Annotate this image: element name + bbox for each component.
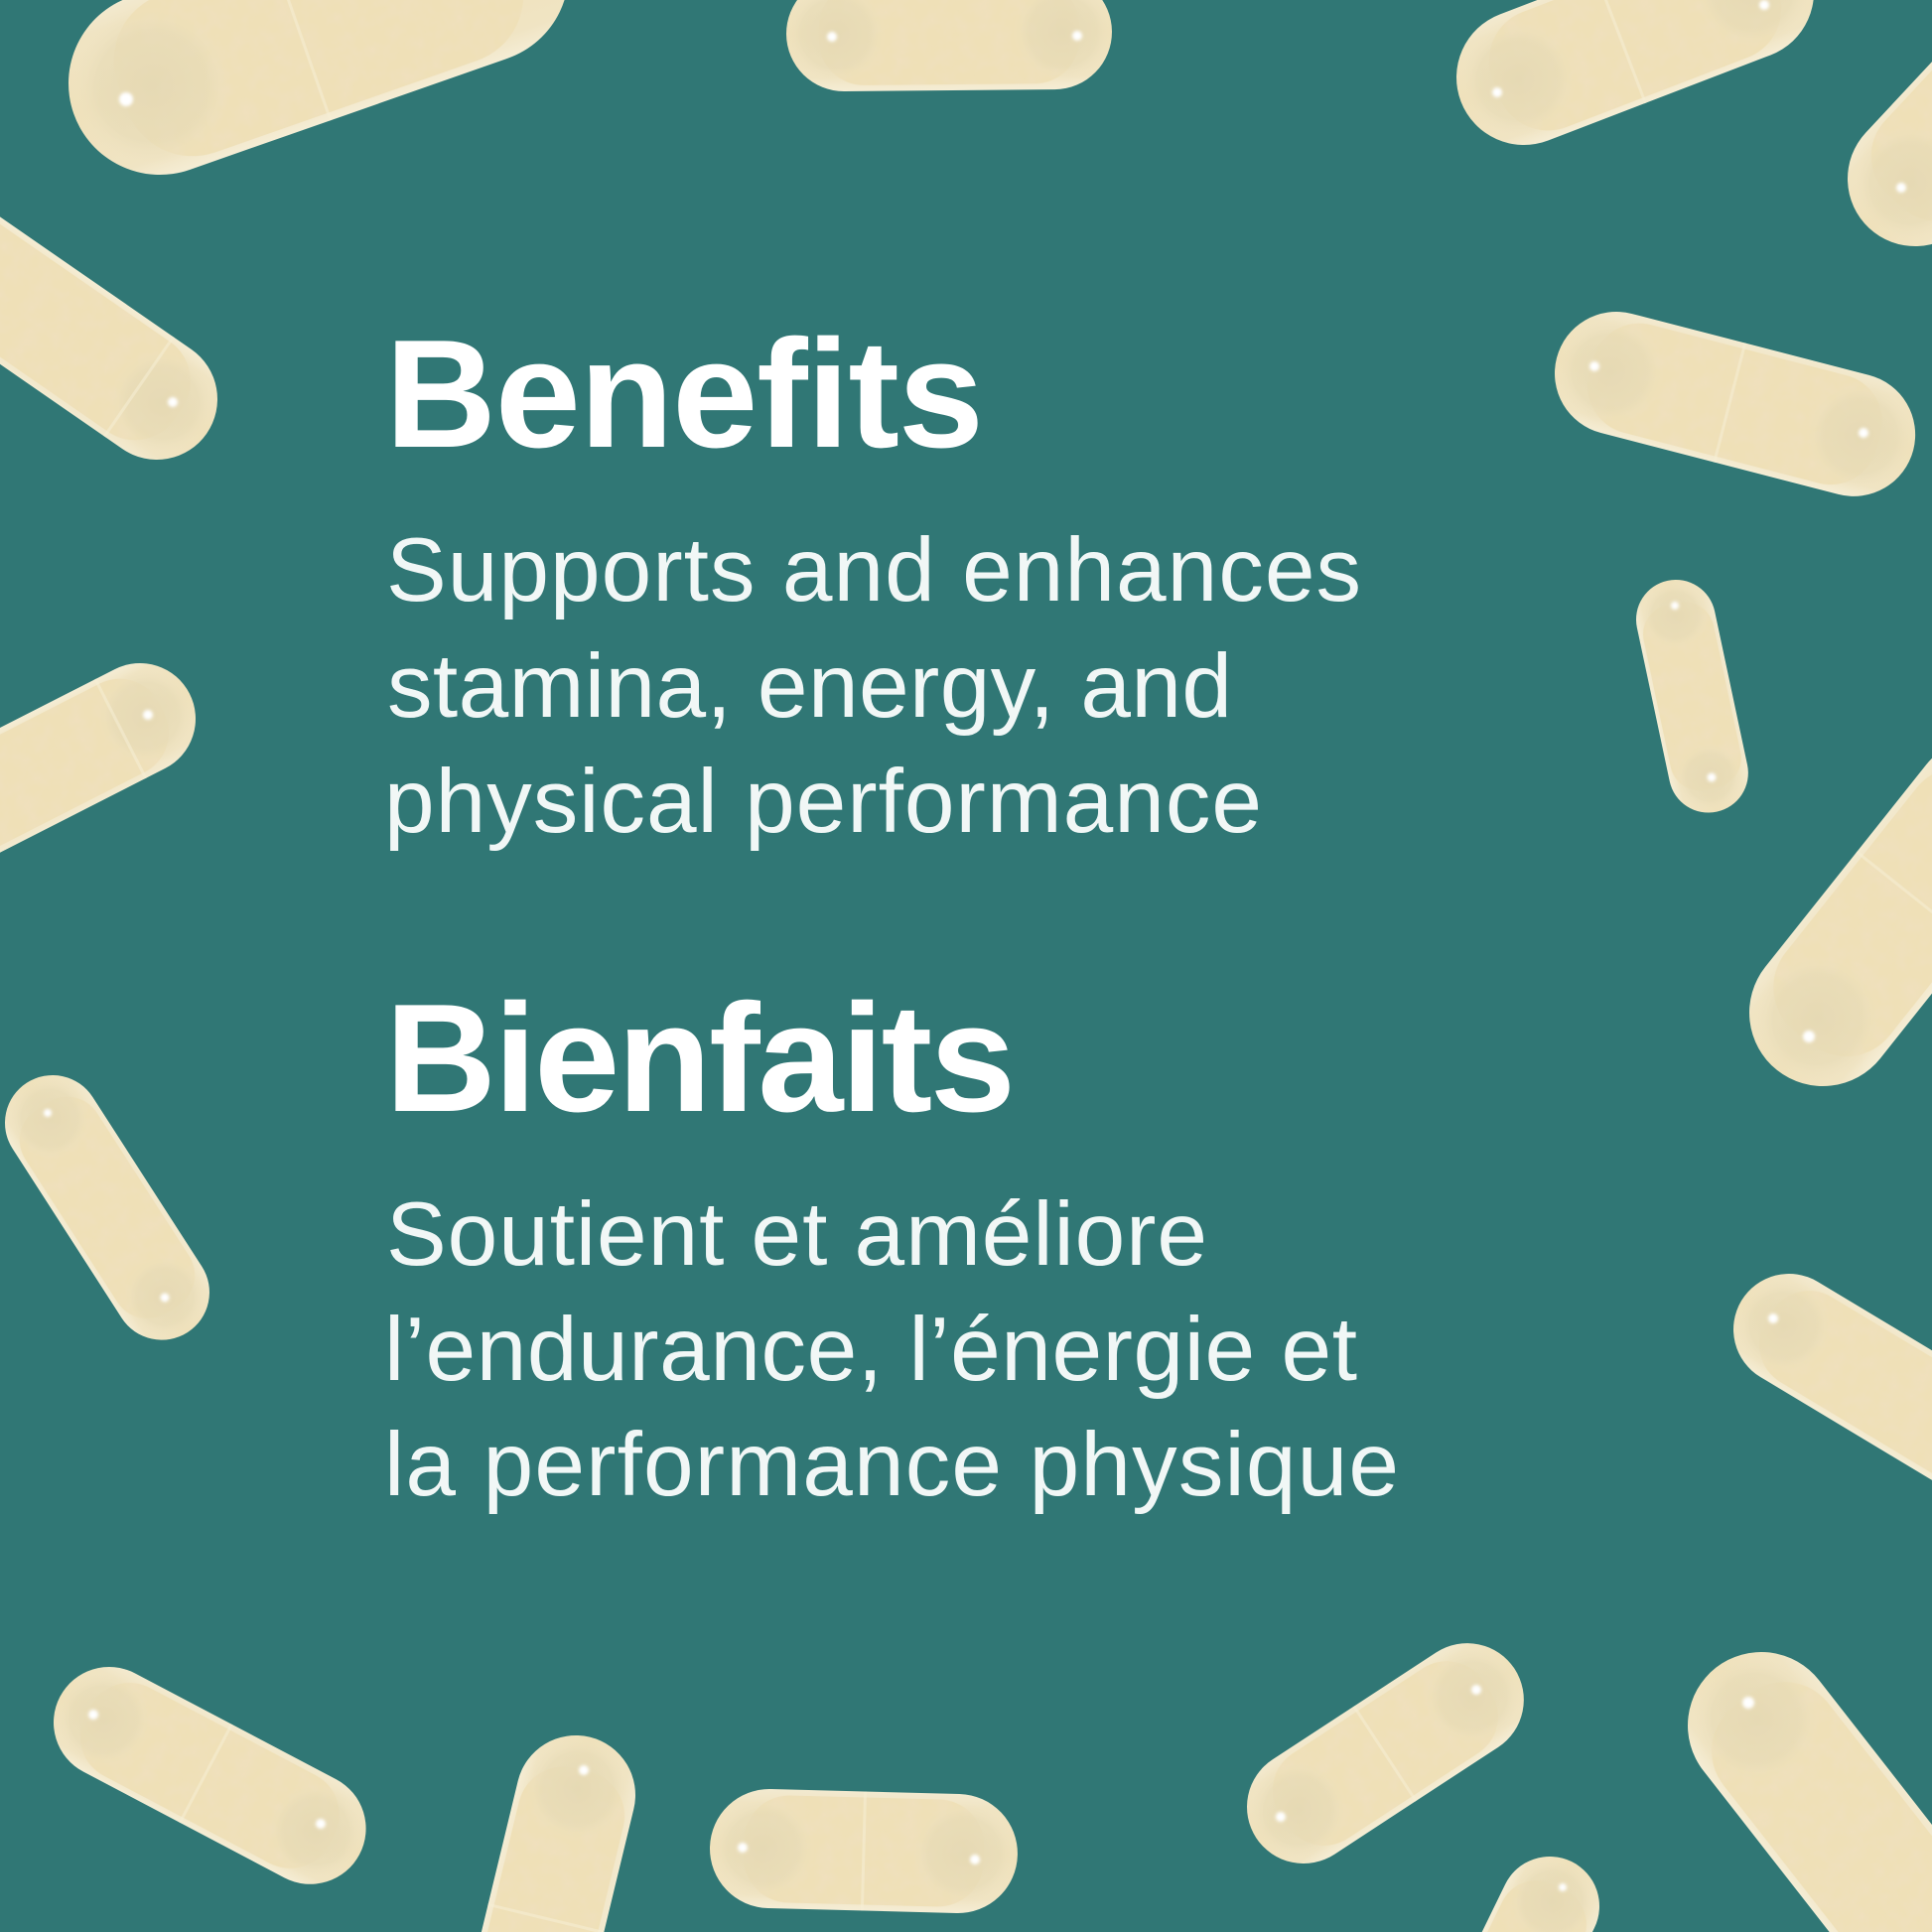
text block: English benefits: physical performance bbox=[384, 752, 1262, 852]
heading: Bienfaits: Bienfaits bbox=[385, 972, 1016, 1144]
capsule: left upper bbox=[0, 145, 241, 483]
text block: French benefits: la performance physique bbox=[384, 1415, 1399, 1515]
text block: English benefits: stamina, energy, and bbox=[387, 636, 1232, 737]
capsule: right small bbox=[1629, 573, 1755, 820]
capsule: top centre bbox=[785, 0, 1112, 92]
text block: English benefits bbox=[384, 520, 1361, 852]
capsule: right lower bbox=[1713, 1253, 1932, 1539]
capsule: far top right bbox=[1820, 0, 1932, 274]
capsule: top left large bbox=[44, 0, 594, 200]
heading: Benefits: Benefits bbox=[385, 308, 984, 480]
text block: French benefits: Soutient et améliore bbox=[386, 1184, 1207, 1285]
capsule: left middle bbox=[0, 644, 214, 919]
capsule: right upper bbox=[1541, 298, 1929, 509]
capsule: top right bbox=[1437, 0, 1834, 165]
text block: English benefits: Supports and enhances bbox=[386, 520, 1361, 621]
capsule: bottom left bbox=[34, 1647, 385, 1903]
text block: French benefits: l’endurance, l’énergie et bbox=[384, 1300, 1357, 1400]
capsule: bottom small bbox=[1427, 1840, 1616, 1932]
capsule: bottom upright bbox=[458, 1724, 647, 1932]
text block: French benefits bbox=[384, 1184, 1399, 1515]
capsule: bottom centre bbox=[708, 1787, 1019, 1915]
capsule: bottom right diagonal bbox=[1225, 1621, 1546, 1885]
capsule: right large bbox=[1720, 708, 1932, 1116]
capsule: left lower bbox=[0, 1057, 227, 1358]
capsule: bottom right large bbox=[1658, 1622, 1932, 1932]
